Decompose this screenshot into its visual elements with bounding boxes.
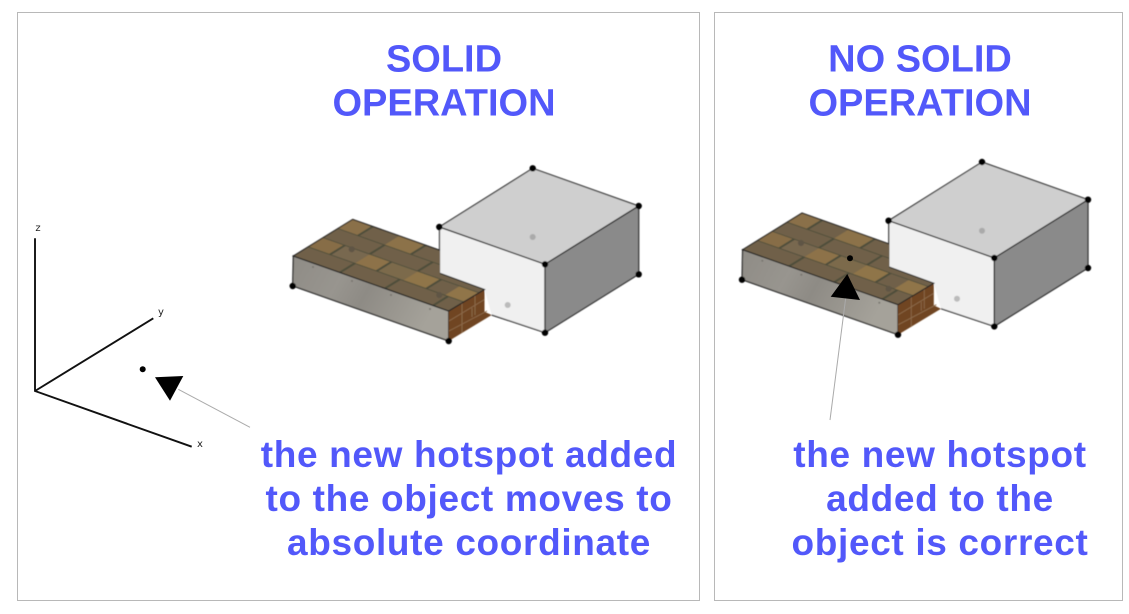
panel border [714, 12, 1122, 600]
heading: solid operation: SOLID [386, 38, 502, 80]
caption: solid operation: to the object moves to [266, 478, 672, 519]
illustration: brick block and box with correct hotspot [739, 159, 1091, 338]
hotspot dot at absolute coordinate [140, 366, 146, 372]
hotspot dot on brick [847, 255, 853, 261]
arrow: pointer to correct hotspot [830, 274, 860, 420]
panel: no solid operation [714, 12, 1122, 600]
caption: no solid operation: object is correct [792, 522, 1088, 563]
caption: solid operation: the new hotspot added [261, 434, 677, 475]
panel: solid operation [18, 12, 700, 600]
arrow: pointer to moved hotspot [155, 376, 250, 427]
caption: no solid operation: the new hotspot [793, 434, 1087, 475]
caption: no solid operation: added to the [826, 478, 1054, 519]
axes: xyz coordinate system: x [197, 439, 203, 450]
axes: xyz coordinate system [35, 223, 203, 450]
axes: xyz coordinate system: z [35, 223, 41, 234]
heading: no solid operation: OPERATION [808, 82, 1032, 124]
illustration: brick block intersecting box [290, 165, 642, 344]
axes: xyz coordinate system: y [158, 307, 164, 318]
panel border [18, 12, 700, 600]
heading: no solid operation: NO SOLID [828, 38, 1012, 80]
caption: solid operation: absolute coordinate [287, 522, 651, 563]
heading: solid operation: OPERATION [332, 82, 556, 124]
